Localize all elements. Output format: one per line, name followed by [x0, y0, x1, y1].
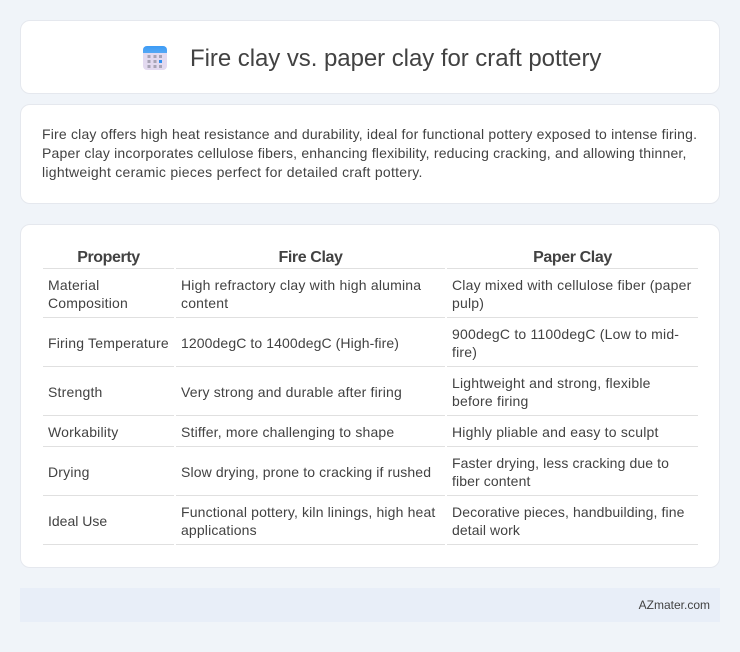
- panel: description: [20, 104, 720, 204]
- text block: description: lightweight ceramic pieces perfect for detailed craft pottery.: [42, 164, 423, 180]
- row: Firing Temperature: 900degC to 1100degC (Low to mid-: [452, 326, 679, 342]
- row: Firing Temperature: fire): [452, 344, 477, 360]
- footer text: AZmater.com: AZmater.com: [639, 598, 710, 612]
- row: Strength: Lightweight and strong, flexible: [452, 375, 651, 391]
- row: Material Composition: Material: [48, 277, 99, 293]
- table header: Fire Clay: Fire Clay: [278, 249, 342, 266]
- row: Firing Temperature: [48, 326, 679, 360]
- row: Workability: Workability: [48, 424, 118, 440]
- row: Material Composition: Clay mixed with cellulose fiber (paper: [452, 277, 691, 293]
- row: Strength: Strength: [48, 384, 103, 400]
- row: Material Composition: High refractory clay with high alumina: [181, 277, 421, 293]
- panel: comparison table: [20, 224, 720, 568]
- row: Workability: [48, 424, 659, 440]
- row: Material Composition: pulp): [452, 295, 484, 311]
- row: Drying: [48, 455, 669, 489]
- row: Drying: Drying: [48, 464, 90, 480]
- row: Ideal Use: Functional pottery, kiln linings, high heat: [181, 504, 435, 520]
- row: Strength: before firing: [452, 393, 529, 409]
- row: Firing Temperature: Firing Temperature: [48, 335, 169, 351]
- text block: description: Fire clay offers high heat resistance and durability, ideal for functional pottery exposed to intense firing.: [42, 126, 697, 142]
- row: Ideal Use: Ideal Use: [48, 513, 107, 529]
- row: Material Composition: Composition: [48, 295, 128, 311]
- row: Material Composition: content: [181, 295, 228, 311]
- row: Workability: Highly pliable and easy to sculpt: [452, 424, 659, 440]
- table header: Paper Clay: Paper Clay: [533, 249, 612, 266]
- row: Workability: Stiffer, more challenging to shape: [181, 424, 394, 440]
- title: Fire clay vs. paper clay for craft pottery: [190, 45, 601, 72]
- row: Material Composition: [48, 277, 692, 311]
- row: Ideal Use: [48, 504, 685, 538]
- row: Drying: fiber content: [452, 473, 530, 489]
- panel: title card: [20, 20, 720, 94]
- icon: calendar: [143, 46, 167, 70]
- row: Firing Temperature: 1200degC to 1400degC (High-fire): [181, 335, 399, 351]
- table header: Property: Property: [77, 249, 140, 266]
- text block: description: Paper clay incorporates cellulose fibers, enhancing flexibility, reducing cracking, and allowing thinner,: [42, 145, 687, 161]
- row: Ideal Use: applications: [181, 522, 257, 538]
- footer: [20, 588, 720, 622]
- row: Drying: Faster drying, less cracking due to: [452, 455, 669, 471]
- row: Ideal Use: Decorative pieces, handbuilding, fine: [452, 504, 685, 520]
- row: Drying: Slow drying, prone to cracking if rushed: [181, 464, 431, 480]
- row: Strength: [48, 375, 651, 409]
- row: Strength: Very strong and durable after firing: [181, 384, 402, 400]
- text block: description: [42, 126, 697, 180]
- row: Ideal Use: detail work: [452, 522, 520, 538]
